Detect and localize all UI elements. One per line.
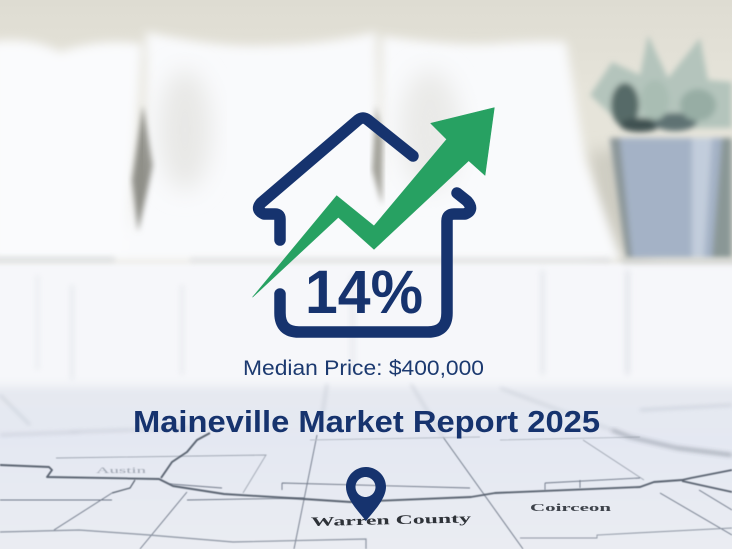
icon: house with growth arrow bbox=[253, 108, 494, 332]
pillows bbox=[0, 32, 622, 262]
pillow gaps and soft shadows bbox=[132, 70, 460, 232]
pot bbox=[610, 138, 732, 258]
map labels: Coirceon bbox=[530, 502, 611, 514]
plant bbox=[590, 35, 732, 132]
map labels: Austin bbox=[96, 466, 146, 475]
county borders bbox=[0, 435, 732, 549]
sofa seat bbox=[0, 263, 732, 393]
map labels bbox=[96, 466, 611, 529]
text: median price: Median Price: $400,000 bbox=[243, 357, 484, 380]
stat: 14%: 14% bbox=[305, 258, 423, 326]
green arrow bbox=[253, 108, 494, 297]
map labels: Warren County bbox=[311, 510, 472, 529]
background: blurred sofa scene bbox=[0, 0, 732, 393]
pot shadow wall bbox=[590, 150, 650, 260]
icon: location pin bbox=[346, 467, 386, 521]
title: Maineville Market Report 2025 bbox=[133, 404, 600, 439]
house outline bbox=[259, 118, 471, 332]
map roads blurred far bbox=[0, 384, 732, 437]
river bbox=[0, 430, 732, 502]
background: road map bbox=[0, 384, 732, 549]
